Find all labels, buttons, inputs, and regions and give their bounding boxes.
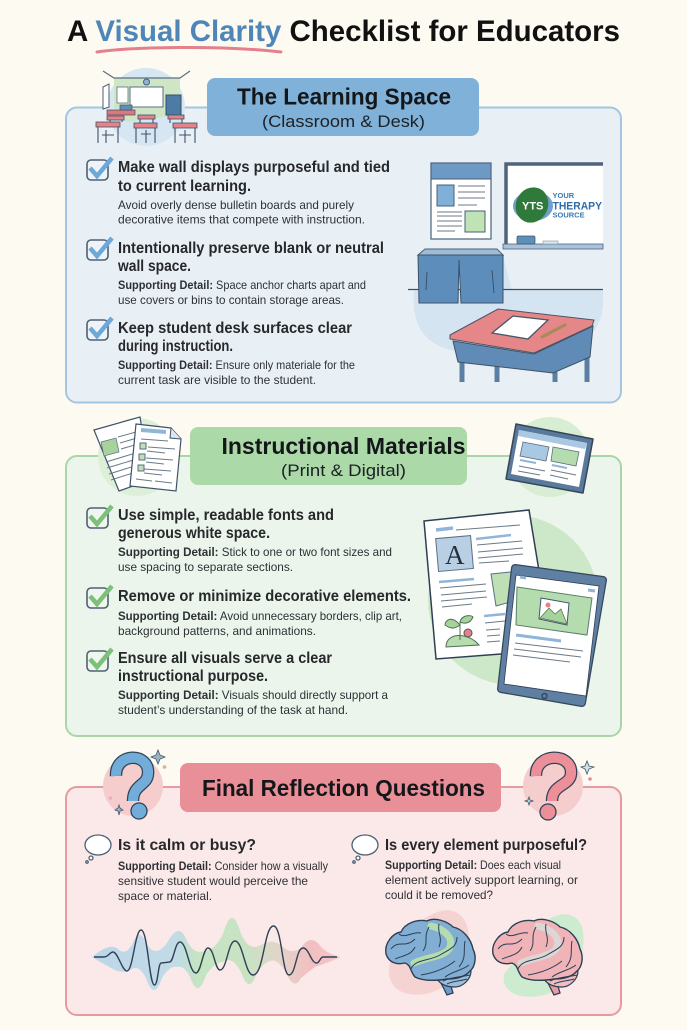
checklist item: decorative elements: background patterns, and animations. [118,624,316,638]
panel: instructional materials [66,417,621,736]
chart: sensory wave [92,918,341,990]
checklist item: desk surfaces: current task are visible to the student. [118,373,316,387]
checklist item: desk surfaces: during instruction. [118,338,233,355]
checklist item: decorative elements [87,586,411,638]
question: every element purposeful [352,835,587,902]
checklist item: blank wall space: Supporting Detail: Space anchor charts apart and [118,278,366,292]
icon: thought bubble [352,835,378,863]
checklist item: wall displays: Avoid overly dense bulletin boards and purely [118,198,354,212]
checklist item: fonts: use spacing to separate sections. [118,560,293,574]
checklist item: desk surfaces: Supporting Detail: Ensure only materiale for the [118,358,355,372]
checklist item: blank wall space: Intentionally preserve blank or neutral [118,240,384,257]
icon: thought bubble [85,835,111,863]
icon: blue question mark [103,750,166,819]
checklist item: wall displays: to current learning. [118,178,251,195]
checklist item: wall displays: decorative items that compete with instruction. [118,212,365,226]
checklist item: visuals purpose: student’s understanding of the task at hand. [118,703,348,717]
checklist item: visuals purpose: instructional purpose. [118,668,268,685]
checklist item: blank wall space: use covers or bins to contain storage areas. [118,293,344,307]
logo: your therapy source: YTS [522,200,543,212]
tablet [501,568,603,703]
checklist item: desk surfaces: Keep student desk surfaces clear [118,320,352,337]
header: the learning space: (Classroom & Desk) [262,112,425,131]
checklist item: blank wall space: wall space. [117,258,191,275]
checklist item: visuals purpose [87,649,388,717]
desk [450,309,594,382]
question: calm or busy [85,835,328,903]
header: instructional materials: (Print & Digital) [281,461,406,480]
checklist item: fonts: Supporting Detail: Stick to one or two font sizes and [118,545,392,559]
checklist item: visuals purpose: Ensure all visuals serve a clear [118,650,332,667]
icon: printed papers [94,417,181,496]
logo: your therapy source [510,182,603,228]
header: the learning space [207,78,479,136]
panel: final reflection questions [66,750,621,1015]
checklist item: fonts: generous white space. [118,525,270,542]
covered table [418,249,503,303]
question: every element purposeful: element actively support learning, or [385,873,578,887]
question: calm or busy: Is it calm or busy? [118,837,256,854]
icon: classroom [96,68,197,146]
question: every element purposeful: Supporting Detail: Does each visual [385,858,561,872]
icon: pink question mark [523,756,594,820]
question: every element purposeful: could it be removed? [385,888,493,902]
checklist item: decorative elements: Supporting Detail: Avoid unnecessary borders, clip art, [118,609,402,623]
logo: your therapy source: SOURCE [552,210,585,220]
checklist item: blank wall space [87,238,384,307]
illustration: classroom wall and desk [408,163,603,382]
checklist item: wall displays: Make wall displays purposeful and tied [118,159,390,176]
checklist item: desk surfaces [87,318,355,387]
question: every element purposeful: Is every element purposeful? [385,837,587,854]
checklist item: wall displays [87,158,390,226]
icon: blue brain [386,910,475,995]
header: the learning space: The Learning Space [237,84,451,110]
checklist item: visuals purpose: Supporting Detail: Visuals should directly support a [118,688,388,702]
printed page [424,510,552,659]
header: final reflection questions [180,763,501,812]
whiteboard with logo [503,163,603,249]
printed page: A [445,540,465,570]
header: final reflection questions: Final Reflection Questions [202,775,485,801]
icon: pink brain [493,914,584,997]
illustration: print page and tablet [424,510,603,703]
title: A Visual Clarity Checklist for Educators [67,15,620,48]
question: calm or busy: space or material. [118,889,212,903]
header: instructional materials [190,427,467,485]
poster [431,163,491,239]
checklist item: decorative elements: Remove or minimize decorative elements. [118,588,411,605]
icon: small tablet [506,417,593,497]
panel: the learning space [66,68,621,402]
logo: your therapy source: YOUR [552,191,575,200]
question: calm or busy: Supporting Detail: Consider how a visually [118,859,328,873]
checklist item: fonts: Use simple, readable fonts and [118,507,334,524]
question: calm or busy: sensitive student would perceive the [118,874,308,888]
checklist item: fonts [87,506,392,574]
header: instructional materials: Instructional Materials [222,433,466,459]
logo: your therapy source: THERAPY [552,200,603,212]
